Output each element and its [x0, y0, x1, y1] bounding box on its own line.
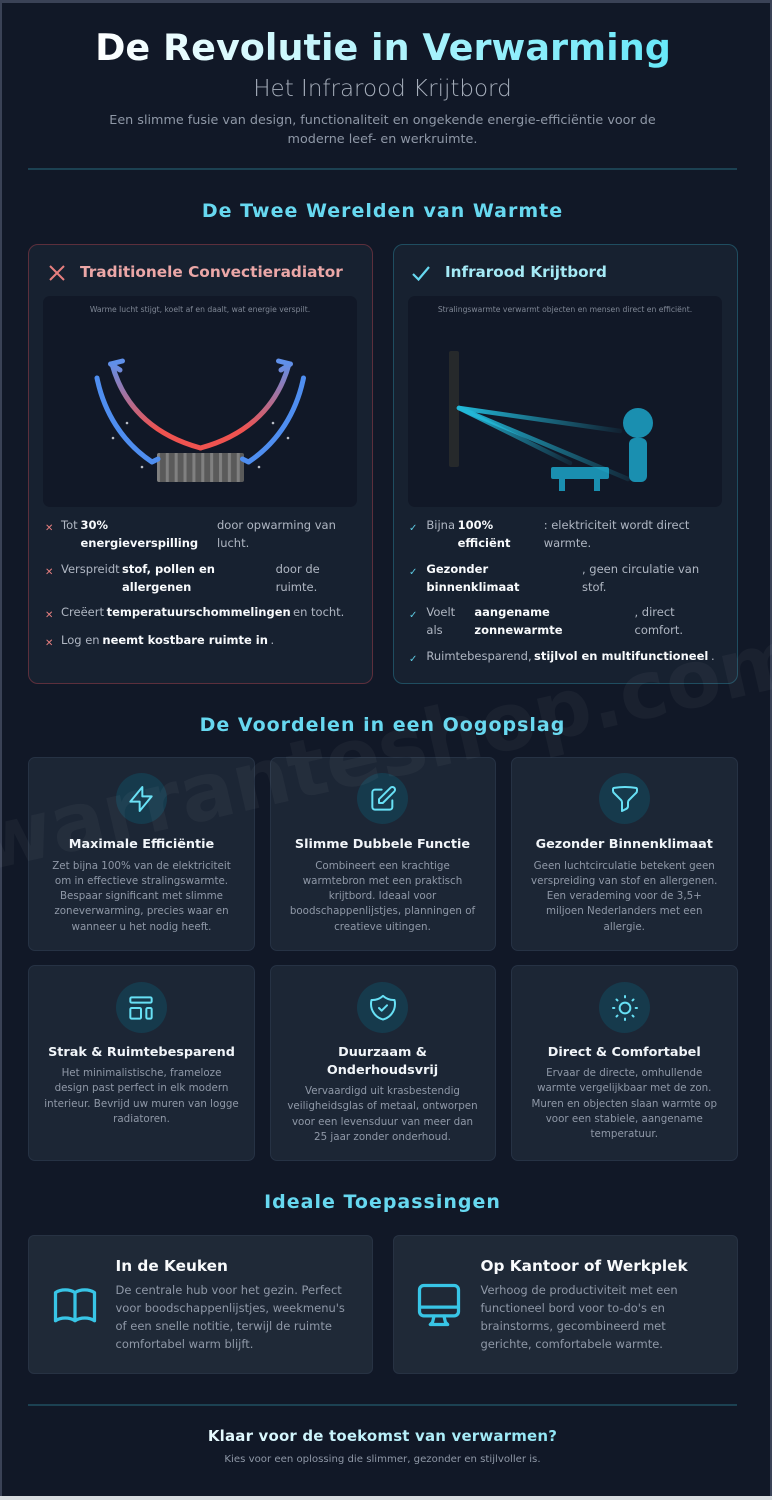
- item 3: comfort.: [634, 623, 683, 637]
- item 2: Gezonder: [426, 562, 488, 576]
- card text: zoneverwarming, precies waar en: [54, 905, 229, 917]
- item 3: aangename: [474, 605, 550, 619]
- item 3: en tocht.: [293, 605, 344, 619]
- item 4: ✓: [409, 654, 417, 665]
- card text: temperatuur.: [591, 1128, 658, 1140]
- card title: Maximale Efficiëntie: [69, 836, 214, 852]
- item 3: [45, 605, 344, 621]
- icon: bolt: [116, 773, 166, 824]
- card text: [290, 860, 476, 933]
- card title: Duurzaam &: [338, 1044, 427, 1060]
- item 2: stof, pollen en: [122, 562, 215, 576]
- card text: [532, 1067, 717, 1140]
- item 4: [45, 633, 274, 649]
- item 1: 30%: [80, 518, 108, 532]
- intro text: Een slimme fusie van design, functionaliteit en ongekende energie-efficiëntie voor de: [109, 113, 656, 128]
- office text: Verhoog de productiviteit met een: [480, 1283, 678, 1297]
- chalkboard: [449, 351, 459, 467]
- item 3: ✓: [409, 610, 417, 621]
- icon: cross: [49, 265, 65, 281]
- card text: allergie.: [604, 921, 645, 933]
- card text: Bespaar significant met slimme: [60, 890, 223, 902]
- card text: Ervaar de directe, omhullende: [546, 1067, 702, 1079]
- footer text: Kies voor een oplossing die slimmer, gezonder en stijlvoller is.: [224, 1454, 541, 1465]
- kitchen title: In de Keuken: [116, 1257, 228, 1275]
- kitchen text: De centrale hub voor het gezin. Perfect: [116, 1283, 342, 1297]
- card: efficiency: [28, 757, 255, 951]
- item 1: 100%: [458, 518, 493, 532]
- card text: Het minimalistische, frameloze: [62, 1067, 221, 1079]
- item 2: binnenklimaat: [426, 580, 519, 594]
- card: office: [393, 1235, 738, 1374]
- heat rays: [459, 408, 628, 479]
- card text: creatieve uitingen.: [334, 921, 431, 933]
- heading: infrared: Infrarood Krijtbord: [445, 263, 607, 281]
- kitchen text: comfortabel warm blijft.: [116, 1337, 253, 1351]
- item 1: Tot: [61, 518, 78, 532]
- card title: [327, 1044, 438, 1078]
- card text: voor een levensduur van meer dan: [292, 1116, 473, 1128]
- heading: traditional: Traditionele Convectieradiator: [80, 263, 343, 281]
- item 2: door de: [276, 562, 320, 576]
- item 4: .: [270, 633, 274, 647]
- card text: Muren en objecten slaan warmte op: [532, 1098, 717, 1110]
- card title: Gezonder Binnenklimaat: [536, 836, 713, 852]
- item 3: Voelt: [426, 605, 455, 619]
- item 4: Ruimtebesparend,: [426, 649, 532, 663]
- item 3: [409, 605, 683, 637]
- card text: [52, 860, 231, 933]
- card text: interieur. Bevrijd uw muren van logge: [44, 1098, 239, 1110]
- icon: sun: [599, 982, 650, 1033]
- bottom edge: [0, 1496, 772, 1500]
- item 3: Creëert: [61, 605, 104, 619]
- convection diagram panel: [43, 296, 357, 507]
- card text: [531, 860, 717, 933]
- card title: Slimme Dubbele Functie: [295, 836, 470, 852]
- card text: wanneer u het nodig heeft.: [72, 921, 211, 933]
- item 2: stof.: [582, 580, 606, 594]
- item 1: ✕: [45, 523, 53, 534]
- item 3: als: [426, 623, 443, 637]
- card title: Strak & Ruimtebesparend: [48, 1044, 235, 1060]
- kitchen text: of een snelle notitie, terwijl de ruimte: [116, 1319, 332, 1333]
- item 4: .: [711, 649, 715, 663]
- item 1: ✓: [409, 523, 417, 534]
- item 1: [45, 518, 336, 550]
- office text: brainstorms, gecombineerd met: [480, 1319, 666, 1333]
- item 3: , direct: [634, 605, 675, 619]
- card text: radiatoren.: [113, 1113, 170, 1125]
- item 2: allergenen: [122, 580, 191, 594]
- card text: design past perfect in elk modern: [55, 1082, 228, 1094]
- item 4: stijlvol en multifunctioneel: [534, 649, 708, 663]
- card text: voor een stabiele, aangename: [546, 1113, 703, 1125]
- list: infrared benefits: [409, 518, 715, 665]
- card text: miljoen Nederlanders met een: [546, 905, 702, 917]
- card title: Direct & Comfortabel: [548, 1044, 701, 1060]
- heading: two worlds: De Twee Werelden van Warmte: [202, 200, 563, 222]
- office text: functioneel bord voor to-do's en: [480, 1301, 665, 1315]
- office text: [480, 1283, 678, 1351]
- item 1: : elektriciteit wordt direct: [544, 518, 689, 532]
- item 1: energieverspilling: [80, 536, 198, 550]
- panel: traditional radiator: [28, 244, 373, 684]
- office title: Op Kantoor of Werkplek: [480, 1257, 688, 1275]
- card: healthy climate: [511, 757, 738, 951]
- icon: check: [412, 266, 430, 282]
- subtitle: Het Infrarood Krijtbord: [253, 76, 512, 102]
- icon: layout: [116, 982, 166, 1033]
- card text: Geen luchtcirculatie betekent geen: [534, 860, 715, 872]
- footer heading: Klaar voor de toekomst van verwarmen?: [208, 1427, 557, 1445]
- card text: warmtebron met een praktisch: [303, 875, 462, 887]
- item 4: ✕: [45, 638, 53, 649]
- card text: [44, 1067, 239, 1125]
- item 2: [409, 562, 699, 594]
- item 2: , geen circulatie van: [582, 562, 699, 576]
- radiator: [157, 453, 244, 482]
- office text: gerichte, comfortabele warmte.: [480, 1337, 663, 1351]
- item 1: [409, 518, 690, 550]
- list: traditional drawbacks: [45, 518, 344, 649]
- caption: convection: Warme lucht stijgt, koelt af en daalt, wat energie verspilt.: [90, 305, 310, 314]
- card text: Vervaardigd uit krasbestendig: [305, 1085, 460, 1097]
- item 3: ✕: [45, 610, 53, 621]
- icon: book: [54, 1288, 96, 1322]
- person: [623, 408, 653, 482]
- card: kitchen: [28, 1235, 373, 1374]
- divider: [28, 1404, 737, 1406]
- item 2: ✓: [409, 567, 417, 578]
- radiation diagram panel: [408, 296, 722, 507]
- cool air arcs: [97, 378, 304, 462]
- item 4: [409, 649, 715, 665]
- item 2: ruimte.: [276, 580, 317, 594]
- table: [551, 467, 609, 491]
- title: De Revolutie in Verwarming: [95, 26, 671, 69]
- icon: pencil square: [357, 773, 408, 824]
- card text: krijtbord. Ideaal voor: [329, 890, 436, 902]
- air particles: [112, 422, 289, 468]
- divider: [28, 168, 737, 170]
- intro text: moderne leef- en werkruimte.: [288, 132, 477, 146]
- item 2: Verspreidt: [61, 562, 120, 576]
- intro text: [109, 113, 656, 146]
- card text: boodschappenlijstjes, planningen of: [290, 905, 475, 917]
- kitchen text: [116, 1283, 345, 1351]
- card text: warmte vergelijkbaar met de zon.: [537, 1082, 711, 1094]
- heading: applications: Ideale Toepassingen: [264, 1191, 501, 1213]
- warm air arcs: [110, 361, 290, 448]
- item 1: warmte.: [544, 536, 591, 550]
- card: durable: [270, 965, 496, 1161]
- card text: verspreiding van stof en allergenen.: [531, 875, 717, 887]
- item 3: zonnewarmte: [474, 623, 562, 637]
- item 1: door opwarming van: [217, 518, 336, 532]
- heading: benefits: De Voordelen in een Oogopslag: [200, 714, 565, 736]
- kitchen text: voor boodschappenlijstjes, weekmenu's: [116, 1301, 345, 1315]
- card: direct: [511, 965, 738, 1161]
- icon: funnel: [599, 773, 650, 824]
- item 2: ✕: [45, 567, 53, 578]
- caption: radiation: Stralingswarmte verwarmt objecten en mensen direct en efficiënt.: [438, 305, 692, 314]
- item 2: [45, 562, 320, 594]
- card text: om in effectieve stralingswarmte.: [55, 875, 228, 887]
- card text: Een verademing voor de 3,5+: [547, 890, 702, 902]
- card text: 25 jaar zonder onderhoud.: [314, 1131, 451, 1143]
- icon: monitor: [418, 1284, 460, 1326]
- item 1: lucht.: [217, 536, 249, 550]
- item 3: temperatuurschommelingen: [107, 605, 291, 619]
- item 1: Bijna: [426, 518, 455, 532]
- card: sleek: [28, 965, 255, 1161]
- card: double function: [270, 757, 496, 951]
- item 4: Log en: [61, 633, 100, 647]
- item 4: neemt kostbare ruimte in: [102, 633, 268, 647]
- icon: shield: [357, 982, 408, 1033]
- panel: infrared board: [393, 244, 738, 684]
- item 1: efficiënt: [458, 536, 510, 550]
- card text: veiligheidsglas of metaal, ontworpen: [287, 1100, 478, 1112]
- card text: [287, 1085, 478, 1143]
- card text: Combineert een krachtige: [315, 860, 450, 872]
- card text: Zet bijna 100% van de elektriciteit: [52, 860, 231, 872]
- card title: Onderhoudsvrij: [327, 1062, 438, 1078]
